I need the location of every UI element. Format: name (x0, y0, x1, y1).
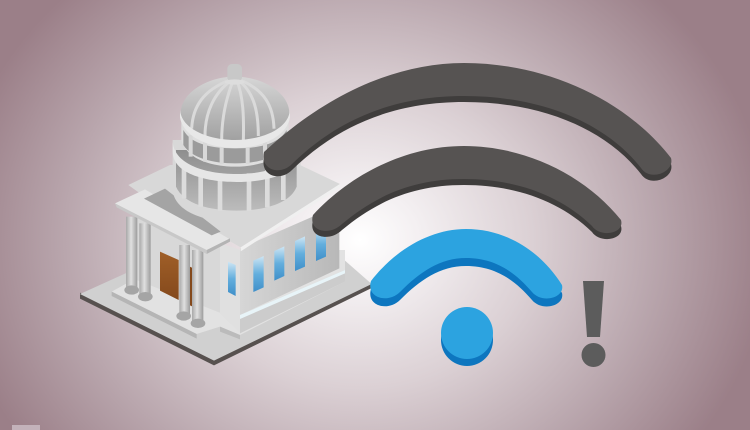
building walls and windows (137, 205, 345, 333)
wifi arc: middle, inactive (312, 146, 621, 239)
wifi arc: inner, active blue (370, 229, 562, 306)
building roof and pediment (115, 165, 340, 254)
building base plate (80, 250, 372, 365)
building door (160, 252, 193, 307)
wifi dot (441, 307, 493, 366)
watermark badge (12, 425, 40, 430)
building dome (173, 64, 301, 222)
icon: domed government building (80, 64, 372, 365)
building columns (124, 217, 205, 328)
exclamation mark (582, 281, 606, 367)
wifi arc: outer, inactive (263, 63, 671, 181)
